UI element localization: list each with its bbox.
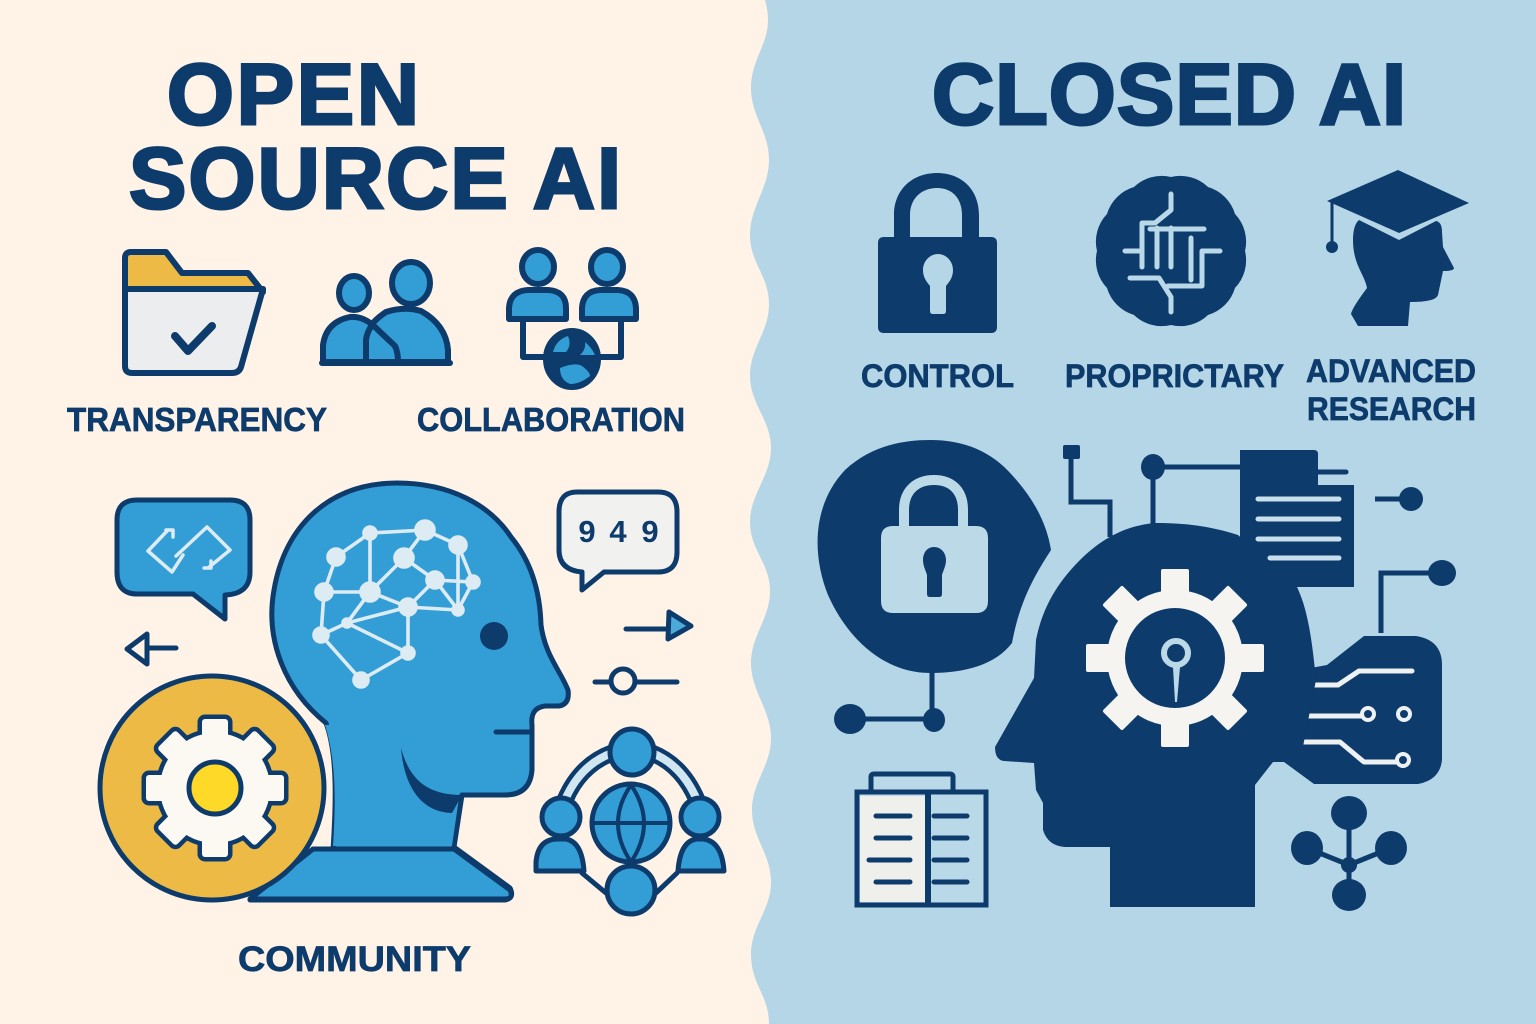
chin shadow <box>401 748 462 813</box>
icon: node network <box>1291 796 1407 911</box>
icon: numbers speech bubble: 9 <box>578 514 596 549</box>
icon: slider <box>595 669 677 693</box>
label: control: CONTROL <box>861 358 1014 394</box>
document <box>1240 450 1354 587</box>
icon: two people <box>322 262 450 363</box>
icon: code speech bubble <box>117 500 250 619</box>
icon: control padlock <box>878 173 997 333</box>
illustration: closed head profile <box>995 445 1456 907</box>
neural network brain <box>314 521 479 687</box>
connector nodes <box>1063 445 1456 586</box>
title: open source AI <box>129 47 621 227</box>
icon: numbers speech bubble <box>559 492 677 590</box>
head silhouette <box>995 523 1316 907</box>
title: closed AI: CLOSED AI <box>932 47 1406 143</box>
title: open source AI: OPEN <box>167 47 419 143</box>
icon: transparency folder <box>125 252 263 373</box>
label: advanced research: RESEARCH <box>1307 391 1476 427</box>
icon: gold gear badge <box>100 676 324 900</box>
label: community: COMMUNITY <box>238 940 471 979</box>
title: open source AI: SOURCE AI <box>129 131 621 227</box>
icon: lock bubble with connector <box>818 440 1051 734</box>
connector lines <box>1071 458 1442 633</box>
label: collaboration: COLLABORATION <box>417 401 685 438</box>
illustration: open head profile <box>250 483 568 900</box>
arrow: right <box>626 612 691 639</box>
label: proprictary: PROPRICTARY <box>1065 358 1284 394</box>
icon: numbers speech bubble: 4 <box>609 514 627 549</box>
label: transparency: TRANSPARENCY <box>67 401 327 438</box>
label: advanced research <box>1306 353 1476 427</box>
icon: open book / ledger <box>857 774 986 905</box>
arrow: left <box>127 634 176 664</box>
icon: collaboration network <box>509 250 636 387</box>
icon: numbers speech bubble: 9 <box>641 514 659 549</box>
eye <box>480 622 508 650</box>
icon: community globe network <box>536 729 724 914</box>
chip <box>1260 636 1442 784</box>
panel: closed AI wavy background <box>750 0 1536 1024</box>
icon: advanced research graduate <box>1326 170 1469 326</box>
mouth <box>496 730 532 734</box>
icon: proprietary circuit badge <box>1096 176 1246 326</box>
gear with keyhole <box>1086 569 1264 747</box>
label: advanced research: ADVANCED <box>1306 353 1476 389</box>
